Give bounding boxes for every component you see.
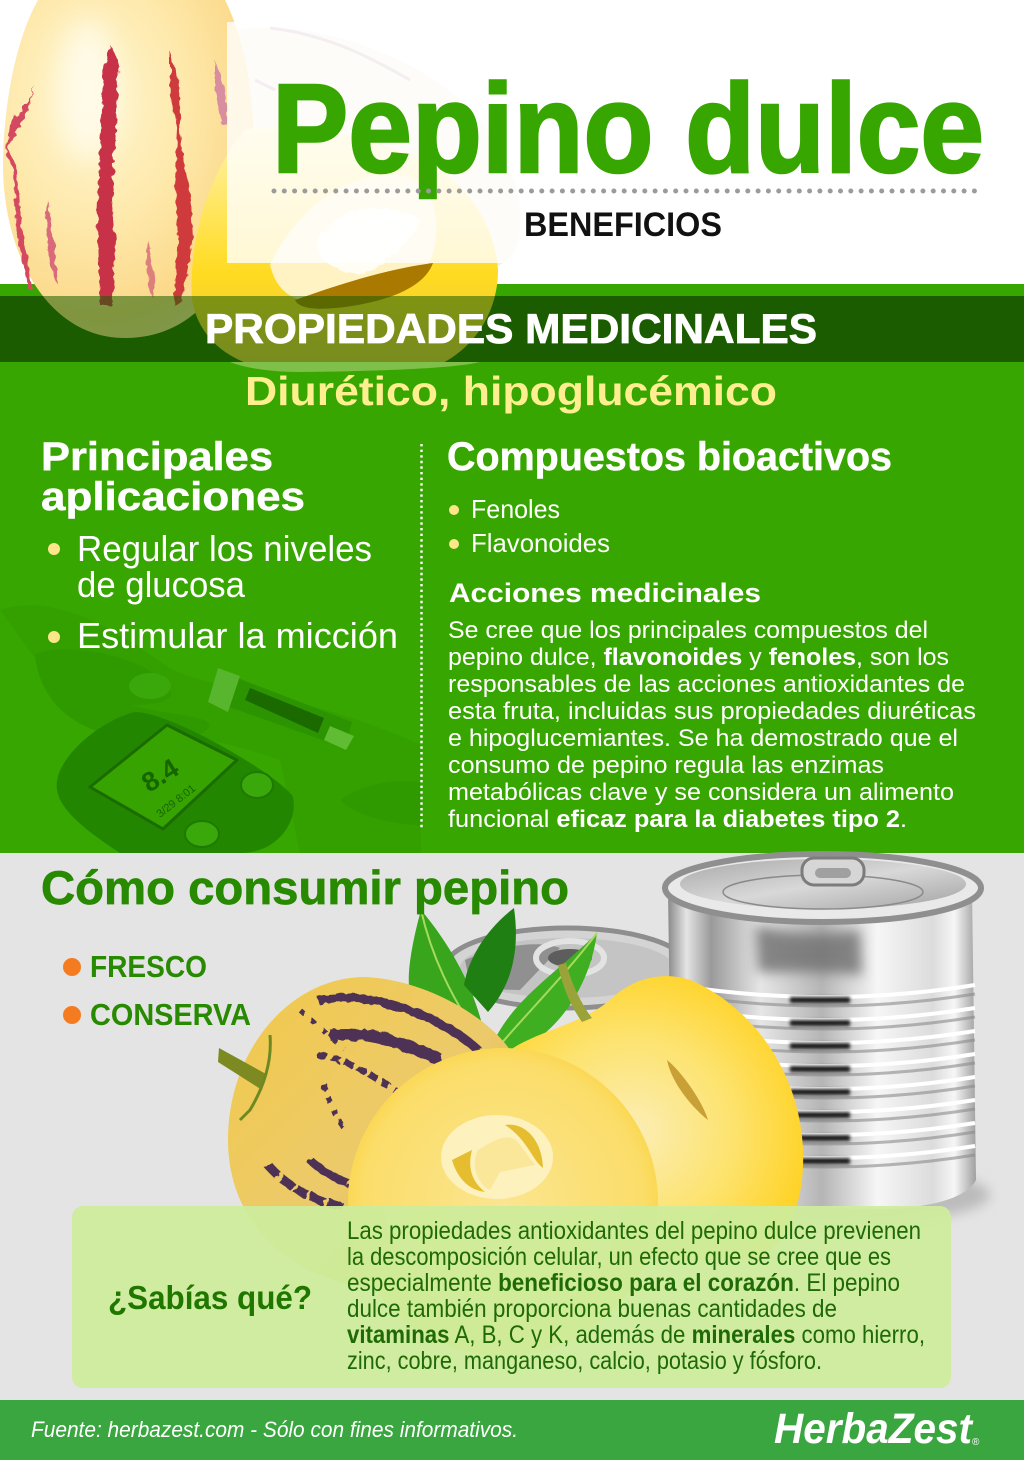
photo: hand with glucose meter and insulin pen bbox=[0, 605, 421, 853]
list: fresco, conserva bbox=[63, 949, 251, 1032]
whole fruit bbox=[3, 0, 253, 338]
logo registered mark: ® bbox=[972, 1437, 980, 1448]
heading: compuestos bioactivos: Compuestos bioactivos bbox=[447, 435, 892, 479]
bullet bbox=[449, 505, 459, 515]
list item: regular glucosa: de glucosa bbox=[77, 564, 246, 605]
insulin pen bbox=[215, 672, 352, 748]
cut fruit seed mass bbox=[318, 208, 420, 275]
can lid bbox=[665, 854, 981, 922]
central pulp bbox=[475, 1137, 535, 1190]
meter reading: 8.4 bbox=[136, 753, 184, 798]
callout text: zinc, cobre, manganeso, calcio, potasio y fósforo. bbox=[347, 1347, 822, 1375]
logo: HerbaZest: HerbaZest bbox=[774, 1405, 974, 1453]
bullet bbox=[63, 958, 81, 976]
heading: principales aplicaciones: aplicaciones bbox=[41, 475, 305, 519]
image: small can bbox=[445, 928, 689, 1008]
text block: acciones medicinales: e hipoglucemiantes. Se ha demostrado que el bbox=[448, 725, 958, 752]
panel: principales aplicaciones bbox=[41, 435, 398, 656]
photo: hand with glucose meter and insulin pen: 3/29 8:01 bbox=[154, 783, 198, 820]
callout text: dulce también proporciona buenas cantidades de bbox=[347, 1295, 837, 1323]
cut fruit back skin bbox=[238, 28, 521, 284]
image: leaves bbox=[409, 908, 597, 1050]
header white translucent panel bbox=[227, 22, 1024, 263]
cut fruit pale inner core bbox=[270, 175, 436, 303]
meter screen bbox=[90, 725, 237, 829]
dotted rule below title bbox=[274, 188, 982, 194]
band: dark green heading band background bbox=[0, 296, 1024, 362]
footer bar bbox=[0, 1400, 1024, 1460]
bullet bbox=[48, 631, 60, 643]
seed cavity bbox=[441, 1115, 553, 1199]
text block: acciones medicinales: consumo de pepino regula las enzimas bbox=[448, 752, 884, 779]
callout heading: ¿Sabías qué? bbox=[108, 1279, 312, 1316]
can pull tab bbox=[802, 858, 864, 885]
panel: como consumir bbox=[0, 853, 1024, 1400]
text block: acciones medicinales: funcional eficaz para la diabetes tipo 2 . bbox=[448, 806, 907, 833]
bullet bbox=[48, 543, 60, 555]
fruit red stripes bbox=[6, 45, 228, 305]
list item: estimular miccion: Estimular la micción bbox=[77, 615, 398, 656]
can ribs bbox=[675, 985, 975, 1167]
callout text: especialmente beneficioso para el corazón. El pepino bbox=[347, 1269, 900, 1297]
list item: flavonoides: Flavonoides bbox=[471, 528, 610, 558]
image: round cut fruit slice bbox=[348, 1048, 658, 1356]
image: long cut fruit bbox=[510, 963, 803, 1260]
callout text: la descomposición celular, un efecto que se cree que es bbox=[347, 1243, 891, 1271]
heading: como consumir pepino: Cómo consumir pepino bbox=[41, 861, 569, 914]
cut fruit edge on green bbox=[230, 362, 480, 372]
cavity crescents bbox=[452, 1125, 543, 1192]
heading: principales aplicaciones: Principales bbox=[41, 435, 273, 479]
list item: regular glucosa: Regular los niveles bbox=[77, 528, 372, 569]
text block: acciones medicinales bbox=[448, 617, 976, 833]
can dark reflection bbox=[755, 925, 862, 975]
text block: acciones medicinales: metabólicas clave y se considera un alimento bbox=[448, 779, 954, 806]
callout: sabias que bbox=[72, 1206, 951, 1388]
text block: acciones medicinales: Se cree que los principales compuestos del bbox=[448, 617, 928, 644]
subtitle: BENEFICIOS bbox=[524, 206, 722, 244]
panel: compuestos bioactivos bbox=[447, 435, 976, 833]
source note: Fuente: herbazest.com - Sólo con fines informativos. bbox=[31, 1417, 518, 1442]
image: large can bbox=[665, 854, 990, 1225]
meter buttons bbox=[241, 772, 273, 798]
callout text: Las propiedades antioxidantes del pepino dulce previenen bbox=[347, 1217, 921, 1245]
callout text: vitaminas A, B, C y K, además de minerales como hierro, bbox=[347, 1321, 925, 1349]
cut fruit cavity bbox=[295, 263, 433, 309]
heading: acciones medicinales: Acciones medicinales bbox=[449, 578, 761, 608]
heading: propiedades medicinales: PROPIEDADES MEDICINALES bbox=[205, 305, 817, 352]
band: translucent dark overlay on fruits bbox=[0, 296, 1024, 362]
bullet bbox=[63, 1006, 81, 1024]
photo: pepino fruits in the header bbox=[3, 0, 521, 372]
text block: acciones medicinales: esta fruta, incluidas sus propiedades diuréticas bbox=[448, 698, 976, 725]
cut fruit yellow flesh bbox=[192, 126, 498, 372]
subheading: properties: Diurético, hipoglucémico bbox=[245, 368, 777, 414]
fruit stem bbox=[218, 1048, 266, 1090]
purple stripes bbox=[268, 998, 478, 1207]
text block: acciones medicinales: responsables de las acciones antioxidantes de bbox=[448, 671, 965, 698]
footer bbox=[0, 1400, 1024, 1460]
list item: conserva: CONSERVA bbox=[90, 997, 251, 1032]
bullet bbox=[449, 539, 459, 549]
fruit seed slit bbox=[667, 1060, 708, 1120]
callout text bbox=[347, 1217, 925, 1375]
panel: green medicinal section bbox=[0, 284, 1024, 853]
text block: acciones medicinales: pepino dulce, flavonoides y fenoles, son los bbox=[448, 644, 949, 671]
fruit stem bbox=[558, 963, 592, 1022]
list item: fenoles: Fenoles bbox=[471, 494, 560, 524]
list item: fresco: FRESCO bbox=[90, 949, 207, 984]
image: whole purple striped fruit bbox=[218, 977, 540, 1290]
glucose meter body bbox=[57, 712, 294, 853]
callout background bbox=[72, 1206, 951, 1388]
